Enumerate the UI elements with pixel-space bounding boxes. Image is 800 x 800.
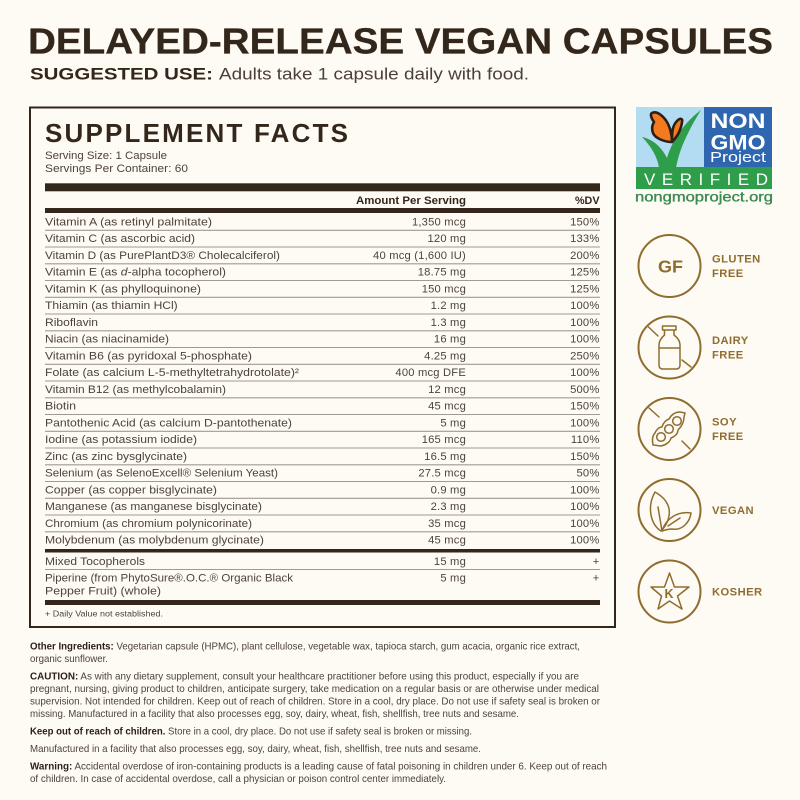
- suggested use line: [30, 65, 529, 83]
- non-GMO project verified logo: NON: [710, 110, 766, 133]
- row: vitamin A: 1,350 mcg: [412, 216, 466, 228]
- row: vitamin C: Vitamin C (as ascorbic acid): [45, 233, 195, 245]
- row: manganese: 2.3 mg: [431, 501, 466, 513]
- row: molybdenum: [45, 535, 600, 547]
- row: copper: 100%: [570, 484, 600, 496]
- icon: butterfly: [651, 112, 682, 142]
- non-GMO project verified logo: [635, 107, 773, 205]
- row: vitamin E: [45, 267, 600, 279]
- row: copper: Copper (as copper bisglycinate): [45, 484, 217, 496]
- row: thiamin: [45, 300, 600, 312]
- row: copper: [45, 484, 600, 496]
- panel: supplement facts: [30, 108, 615, 627]
- non-GMO project verified logo: VERIFIED: [644, 170, 768, 189]
- row: iodine: 110%: [571, 434, 600, 446]
- row: mixed tocopherols: [45, 556, 600, 568]
- row: vitamin A: [45, 216, 600, 228]
- warning text: of children. In case of accidental overdose, call a physician or poison control center immediately.: [30, 774, 446, 785]
- row: copper: 0.9 mg: [431, 484, 466, 496]
- row: molybdenum: 100%: [570, 535, 600, 547]
- row: niacin: 100%: [570, 334, 600, 346]
- warning text: [30, 761, 607, 785]
- row: manganese: [45, 501, 600, 513]
- badge: kosher: KOSHER: [712, 586, 763, 598]
- row: vitamin D: 200%: [570, 250, 600, 262]
- suggested use line: SUGGESTED USE:: [30, 65, 213, 83]
- badge: gluten free: [638, 235, 761, 297]
- row: pantothenic acid: 100%: [570, 417, 600, 429]
- row: vitamin E: 125%: [570, 267, 600, 279]
- row: chromium: 35 mcg: [428, 518, 466, 530]
- row: vitamin E: 18.75 mg: [418, 267, 466, 279]
- badge: vegan: [638, 479, 754, 541]
- row: riboflavin: [45, 317, 600, 329]
- row: vitamin A: Vitamin A (as retinyl palmitate): [45, 216, 212, 228]
- row: chromium: [45, 518, 600, 530]
- caution text: pregnant, nursing, giving product to children, anticipate surgery, take medication on a regular basis or are otherwise under medical: [30, 684, 599, 695]
- row: thiamin: Thiamin (as thiamin HCl): [45, 300, 178, 312]
- row: thiamin: 1.2 mg: [431, 300, 466, 312]
- row: biotin: Biotin: [45, 401, 76, 413]
- badge: soy free: FREE: [712, 431, 744, 443]
- row: selenium: 27.5 mcg: [418, 468, 466, 480]
- row: piperine: +: [593, 573, 600, 585]
- heading: supplement facts: SUPPLEMENT FACTS: [45, 118, 348, 148]
- row: vitamin B6: 250%: [570, 350, 600, 362]
- column headers: %DV: [575, 195, 600, 207]
- row: iodine: 165 mcg: [422, 434, 466, 446]
- other ingredients text: Other Ingredients: Vegetarian capsule (HPMC), plant cellulose, vegetable wax, tapioca starch, gum acacia, organic rice extract,: [30, 641, 580, 652]
- icon: star with K: K: [664, 587, 674, 601]
- row: mixed tocopherols: Mixed Tocopherols: [45, 556, 146, 568]
- row: vitamin K: Vitamin K (as phylloquinone): [45, 283, 201, 295]
- row: vitamin K: 150 mcg: [422, 283, 466, 295]
- row: niacin: Niacin (as niacinamide): [45, 334, 169, 346]
- row: pantothenic acid: Pantothenic Acid (as calcium D-pantothenate): [45, 417, 292, 429]
- icon: grass check: [642, 110, 701, 168]
- row: vitamin E: Vitamin E (as d-alpha tocopherol): [45, 267, 226, 279]
- row: vitamin B12: [45, 384, 600, 396]
- non-GMO project verified logo: Project: [710, 150, 766, 166]
- row: molybdenum: 45 mcg: [428, 535, 466, 547]
- row: pantothenic acid: 5 mg: [440, 417, 466, 429]
- row: vitamin D: [45, 250, 600, 262]
- row: niacin: [45, 334, 600, 346]
- badge: dairy free: [638, 316, 749, 378]
- column headers: [356, 195, 600, 207]
- row: vitamin B6: [45, 350, 600, 362]
- row: piperine: 5 mg: [440, 573, 466, 585]
- row: selenium: 50%: [576, 468, 600, 480]
- row: biotin: 45 mcg: [428, 401, 466, 413]
- row: vitamin C: [45, 233, 600, 245]
- row: selenium: [45, 468, 600, 480]
- keep out of reach text: Keep out of reach of children. Store in a cool, dry place. Do not use if safety seal is broken or missing.: [30, 726, 472, 737]
- badge: dairy free: FREE: [712, 350, 744, 362]
- row: zinc: 150%: [570, 451, 600, 463]
- row: iodine: [45, 434, 600, 446]
- row: pantothenic acid: [45, 417, 600, 429]
- row: selenium: Selenium (as SelenoExcell® Selenium Yeast): [45, 468, 278, 480]
- row: zinc: 16.5 mg: [424, 451, 466, 463]
- serving information: Servings Per Container: 60: [45, 163, 188, 175]
- other ingredients text: organic sunflower.: [30, 654, 108, 665]
- badge: dairy free: DAIRY: [712, 335, 749, 347]
- caution text: CAUTION: As with any dietary supplement, consult your healthcare practitioner before using this product, especially if you are: [30, 671, 579, 682]
- badge: soy free: SOY: [712, 416, 737, 428]
- row: chromium: 100%: [570, 518, 600, 530]
- row: niacin: 16 mg: [434, 334, 466, 346]
- caution text: supervision. Not intended for children. Keep out of reach of children. Store in a cool, dry place. Do not use if safety seal is broken or: [30, 696, 601, 707]
- suggested use line: Adults take 1 capsule daily with food.: [219, 65, 529, 83]
- row: mixed tocopherols: +: [593, 556, 600, 568]
- row: vitamin D: 40 mcg (1,600 IU): [373, 250, 466, 262]
- row: riboflavin: 1.3 mg: [431, 317, 466, 329]
- row: vitamin K: 125%: [570, 283, 600, 295]
- row: folate: 400 mcg DFE: [395, 367, 466, 379]
- badge: kosher: [638, 560, 763, 622]
- row: folate: Folate (as calcium L-5-methyltetrahydrotolate)²: [45, 367, 299, 379]
- row: molybdenum: Molybdenum (as molybdenum glycinate): [45, 535, 264, 547]
- row: chromium: Chromium (as chromium polynicorinate): [45, 518, 252, 530]
- badge: soy free: [638, 398, 744, 460]
- row: vitamin A: 150%: [570, 216, 600, 228]
- row: riboflavin: Riboflavin: [45, 317, 98, 329]
- non-GMO project verified logo: nongmoproject.org: [635, 189, 773, 205]
- caution text: [30, 671, 601, 720]
- row: zinc: [45, 451, 600, 463]
- row: vitamin B6: 4.25 mg: [424, 350, 466, 362]
- row: vitamin C: 120 mg: [427, 233, 466, 245]
- row: piperine: Pepper Fruit) (whole): [45, 586, 161, 598]
- row: vitamin K: [45, 283, 600, 295]
- badge: vegan: VEGAN: [712, 505, 754, 517]
- row: folate: [45, 367, 600, 379]
- other ingredients text: [30, 641, 580, 665]
- row: zinc: Zinc (as zinc bysglycinate): [45, 451, 187, 463]
- row: manganese: Manganese (as manganese bisglycinate): [45, 501, 262, 513]
- row: vitamin C: 133%: [570, 233, 600, 245]
- badge: gluten free: GF: [658, 256, 683, 276]
- row: vitamin B12: Vitamin B12 (as methylcobalamin): [45, 384, 226, 396]
- footnote: + Daily Value not established.: [45, 608, 163, 618]
- row: thiamin: 100%: [570, 300, 600, 312]
- badge: gluten free: GLUTEN: [712, 253, 761, 265]
- row: vitamin B12: 12 mcg: [428, 384, 466, 396]
- row: iodine: Iodine (as potassium iodide): [45, 434, 197, 446]
- row: biotin: 150%: [570, 401, 600, 413]
- row: manganese: 100%: [570, 501, 600, 513]
- manufacturing text: Manufactured in a facility that also processes egg, soy, dairy, wheat, fish, shellfish, tree nuts and sesame.: [30, 744, 481, 755]
- row: piperine: [45, 573, 600, 598]
- caution text: missing. Manufactured in a facility that also processes egg, soy, dairy, wheat, fish, shellfish, tree nuts and sesame.: [30, 709, 519, 720]
- column headers: Amount Per Serving: [356, 195, 466, 207]
- non-GMO project verified logo: GMO: [710, 132, 766, 154]
- row: biotin: [45, 401, 600, 413]
- row: vitamin B12: 500%: [570, 384, 600, 396]
- row: piperine: Piperine (from PhytoSure®.O.C.® Organic Black: [45, 573, 294, 585]
- row: folate: 100%: [570, 367, 600, 379]
- row: vitamin D: Vitamin D (as PurePlantD3® Cholecalciferol): [45, 250, 280, 262]
- row: vitamin B6: Vitamin B6 (as pyridoxal 5-phosphate): [45, 350, 252, 362]
- serving information: [45, 150, 188, 175]
- icon: milk bottle: [659, 326, 680, 369]
- icon: soybean pod: [652, 412, 685, 446]
- icon: leaves: [650, 492, 691, 531]
- warning text: Warning: Accidental overdose of iron-containing products is a leading cause of fatal poisoning in children under 6. Keep out of reach: [30, 761, 607, 772]
- badge: gluten free: FREE: [712, 268, 744, 280]
- title: DELAYED-RELEASE VEGAN CAPSULES: [28, 20, 773, 61]
- serving information: Serving Size: 1 Capsule: [45, 150, 167, 162]
- row: mixed tocopherols: 15 mg: [434, 556, 466, 568]
- row: riboflavin: 100%: [570, 317, 600, 329]
